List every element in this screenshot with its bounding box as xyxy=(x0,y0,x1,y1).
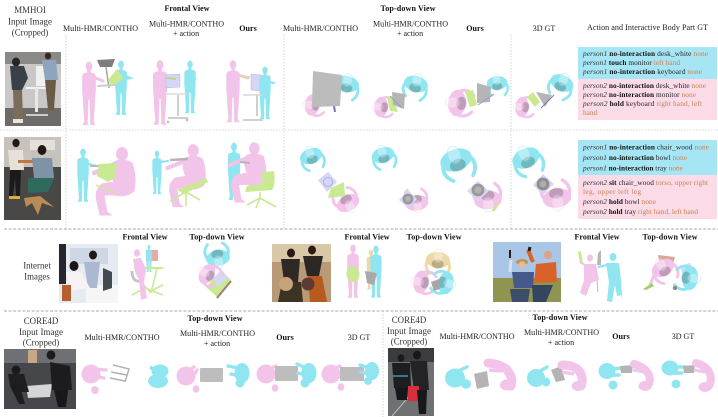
headers: internet images: Frontal View xyxy=(344,232,390,242)
column headers: top-down view: Ours xyxy=(466,24,484,33)
row label: MMHOI input image: (Cropped) xyxy=(12,28,48,38)
photo: office scene xyxy=(59,244,118,303)
headers: CORE4D right: Multi-HMR/CONTHO xyxy=(524,328,599,337)
figures: CORE4D left with action xyxy=(176,363,250,393)
figure: office frontal xyxy=(132,245,163,300)
column headers: top-down view: 3D GT xyxy=(533,24,555,33)
action list: row 1: person2 hold keyboard right hand, left xyxy=(582,99,702,108)
row label: CORE4D input right: CORE4D xyxy=(392,315,427,325)
figures: CORE4D left Multi-HMR/CONTHO xyxy=(82,364,168,394)
action list: row 2: person2 sit chair_wood torso, upper right xyxy=(582,178,708,187)
action list: row 1: person1 no-interaction keyboard none xyxy=(582,67,702,76)
action list: row 2: person1 no-interaction bowl none xyxy=(582,153,687,162)
photo: CORE4D right xyxy=(388,348,434,416)
action list: row 2: leg, upper left leg xyxy=(583,187,641,196)
photo: MMHOI row 2 xyxy=(4,137,61,220)
action list: row 2 xyxy=(578,140,717,219)
figure: bottles frontal xyxy=(578,250,622,302)
row label: MMHOI input image xyxy=(8,5,52,38)
row 2 top-down: with action xyxy=(370,142,429,215)
row 1 frontal: ours xyxy=(226,60,274,122)
headers: CORE4D left: Top-down View xyxy=(188,314,243,323)
row 1 top-down: with action xyxy=(371,71,430,118)
row 2 top-down: Multi-HMR/CONTHO xyxy=(297,143,363,218)
action list: row 1: person1 touch monitor left hand xyxy=(582,58,680,67)
headers: CORE4D left: Ours xyxy=(276,333,294,342)
row label: MMHOI input image: Input Image xyxy=(8,16,52,26)
headers: CORE4D right: 3D GT xyxy=(672,332,694,341)
row label: CORE4D input right xyxy=(387,315,431,346)
photo: two men with bottles xyxy=(493,242,561,302)
headers: CORE4D left: + action xyxy=(204,339,230,348)
column headers: top-down view: + action xyxy=(397,29,423,38)
headers: CORE4D right: Ours xyxy=(612,332,630,341)
row 1 frontal: with action xyxy=(153,60,196,125)
action list: row 2: person1 no-interaction chair_wood none xyxy=(582,142,709,152)
headers: internet images xyxy=(122,232,698,242)
row 2 frontal: ours xyxy=(228,143,276,208)
action list: row 2: person2 hold bowl none xyxy=(582,197,656,206)
figures: CORE4D right ours xyxy=(598,363,652,391)
headers: CORE4D left xyxy=(84,314,370,348)
row label: CORE4D input right: (Cropped) xyxy=(391,336,427,346)
column headers: frontal view xyxy=(63,4,257,38)
figure: office top-down xyxy=(194,241,231,298)
headers: CORE4D left: 3D GT xyxy=(348,333,370,342)
row 1 frontal: Multi-HMR/CONTHO xyxy=(82,59,130,125)
photo: CORE4D left xyxy=(4,349,76,409)
row label: CORE4D input left xyxy=(19,316,63,348)
column headers: frontal view: Frontal View xyxy=(164,4,210,13)
action list: row 2: person1 no-interaction tray none xyxy=(582,164,683,172)
action list: row 1: person1 no-interaction desk_white none xyxy=(582,49,708,58)
column headers: frontal view: + action xyxy=(173,29,199,38)
headers: internet images: Top-down View xyxy=(406,232,462,242)
figures: CORE4D left 3D GT xyxy=(322,362,379,391)
figures: CORE4D right with action xyxy=(527,365,584,391)
column header: action and interactive body part: Action and Interactive Body Part GT xyxy=(587,23,708,32)
action list: row 1: person2 no-interaction desk_white none xyxy=(582,81,706,90)
row 1 top-down: Multi-HMR/CONTHO xyxy=(302,71,361,116)
photo: drummers xyxy=(272,244,331,302)
row label: internet images: Internet xyxy=(23,260,51,270)
column headers: frontal view: Multi-HMR/CONTHO xyxy=(149,20,224,28)
headers: CORE4D right xyxy=(440,313,694,347)
headers: CORE4D left: Multi-HMR/CONTHO xyxy=(180,329,255,338)
headers: CORE4D right: Top-down View xyxy=(532,313,588,322)
row 2 frontal: Multi-HMR/CONTHO xyxy=(77,148,135,215)
figure: drummers frontal xyxy=(346,245,382,298)
column headers: top-down view xyxy=(283,4,555,38)
headers: CORE4D right: Multi-HMR/CONTHO xyxy=(440,332,515,341)
headers: CORE4D right: + action xyxy=(548,338,574,347)
row 2 top-down: ours xyxy=(437,141,502,213)
figures: CORE4D right 3D GT xyxy=(662,360,712,392)
headers: internet images: Top-down View xyxy=(190,232,245,242)
row label: CORE4D input left: (Cropped) xyxy=(23,338,59,348)
column headers: top-down view: Multi-HMR/CONTHO xyxy=(283,24,358,33)
figure: drummers top-down xyxy=(409,249,458,296)
row label: internet images: Images xyxy=(24,272,50,282)
row label: CORE4D input right: Input Image xyxy=(387,326,431,336)
figures: CORE4D left ours xyxy=(256,363,316,392)
row label: MMHOI input image: MMHOI xyxy=(14,5,46,15)
row 1 top-down: ours xyxy=(444,73,508,117)
row 2 top-down: 3D GT xyxy=(508,140,573,213)
headers: internet images: Frontal View xyxy=(574,232,620,242)
action list: row 1: hand xyxy=(583,108,598,117)
action list: row 2: person2 hold tray right hand, left hand xyxy=(582,207,698,216)
action list: row 1 xyxy=(578,47,717,120)
row label: CORE4D input left: CORE4D xyxy=(24,316,59,326)
column headers: frontal view: Ours xyxy=(239,24,257,33)
photo: MMHOI row 1 xyxy=(5,52,61,126)
row 2 frontal: with action xyxy=(152,145,208,207)
row label: internet images xyxy=(23,260,51,282)
column headers: frontal view: Multi-HMR/CONTHO xyxy=(63,24,138,33)
row label: CORE4D input left: Input Image xyxy=(19,327,63,337)
headers: CORE4D left: Multi-HMR/CONTHO xyxy=(84,333,160,342)
column headers: top-down view: Top-down View xyxy=(380,4,436,13)
figures: CORE4D right Multi-HMR/CONTHO xyxy=(445,363,514,390)
action list: row 1: person2 no-interaction monitor none xyxy=(582,90,696,99)
row 1 top-down: 3D GT xyxy=(512,69,577,118)
column headers: top-down view: Multi-HMR/CONTHO xyxy=(373,20,448,28)
figure: bottles top-down xyxy=(643,253,701,291)
headers: internet images: Top-down View xyxy=(642,232,698,242)
headers: internet images: Frontal View xyxy=(122,232,168,242)
